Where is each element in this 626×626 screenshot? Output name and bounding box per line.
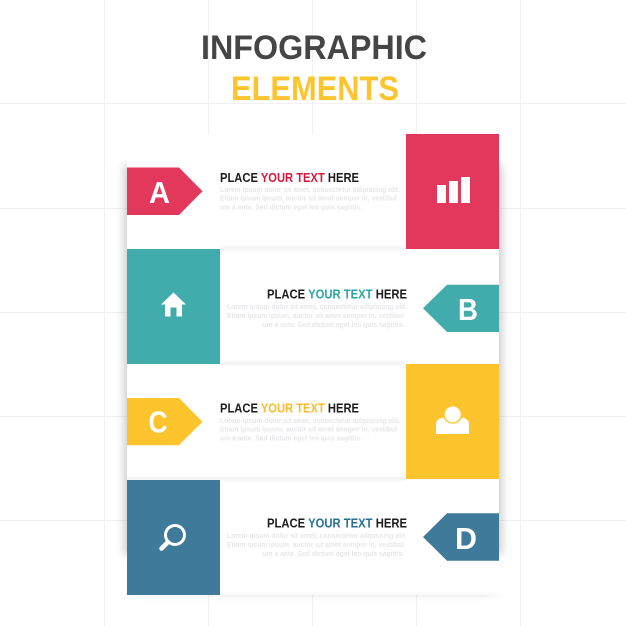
title: INFOGRAPHIC [201, 29, 427, 67]
panel: row A [127, 134, 499, 249]
text block D: PLACE YOUR TEXT HERE [267, 517, 407, 531]
square: red [406, 134, 499, 249]
text block C: um a ante. Sed dictum eget leo quis sagittis. [220, 434, 362, 442]
panel: row C [127, 364, 499, 479]
text block A: Etiam ipsum ipsum, auctor sit amet semper in, vestibul [220, 194, 397, 202]
panel: row D [127, 480, 499, 595]
arrow tag C [127, 398, 202, 445]
text block B: Etiam ipsum ipsum, auctor sit amet semper in, vestibul [227, 311, 404, 320]
arrow tag B: B [458, 292, 478, 327]
arrow tag A [127, 168, 202, 215]
text block D: Etiam ipsum ipsum, auctor sit amet semper in, vestibul [227, 540, 404, 549]
text block B [227, 288, 407, 329]
text block D: um a ante. Sed dictum eget leo quis sagittis. [262, 549, 404, 558]
text block B: um a ante. Sed dictum eget leo quis sagittis. [262, 320, 404, 329]
arrow tag A: A [149, 175, 170, 210]
text block A: um a ante. Sed dictum eget leo quis sagittis. [220, 202, 362, 212]
square: teal [127, 249, 220, 364]
square: yellow [406, 364, 499, 479]
icon: house [161, 292, 186, 316]
text block C [220, 402, 400, 442]
square: blue [127, 480, 220, 595]
title [201, 29, 427, 108]
panel shadow [124, 165, 502, 597]
text block D [227, 517, 407, 558]
text block C: Lorem ipsum dolor sit amet, consectetur adipiscing elit. [220, 416, 400, 425]
text block B: Lorem ipsum dolor sit amet, consectetur adipiscing elit. [227, 302, 407, 311]
arrow tag D [423, 513, 499, 561]
panel: row B [127, 249, 499, 364]
text block C: PLACE YOUR TEXT HERE [220, 402, 359, 416]
text block D: Lorem ipsum dolor sit amet, consectetur adipiscing elit. [227, 531, 407, 540]
icon: person [436, 406, 469, 434]
text block A: Lorem ipsum dolor sit amet, consectetur adipiscing elit. [220, 185, 400, 194]
arrow tag B [423, 285, 499, 332]
text block A [220, 171, 400, 212]
arrow tag D: D [455, 521, 477, 556]
text block C: Etiam ipsum ipsum, auctor sit amet semper in, vestibul [220, 425, 397, 434]
arrow tag C: C [148, 405, 168, 440]
icon: magnifier [162, 526, 184, 548]
text block B: PLACE YOUR TEXT HERE [267, 288, 407, 302]
panel: rows background [127, 134, 499, 595]
icon: bar chart [437, 177, 470, 203]
title: ELEMENTS [231, 70, 399, 108]
text block A: PLACE YOUR TEXT HERE [220, 171, 359, 185]
